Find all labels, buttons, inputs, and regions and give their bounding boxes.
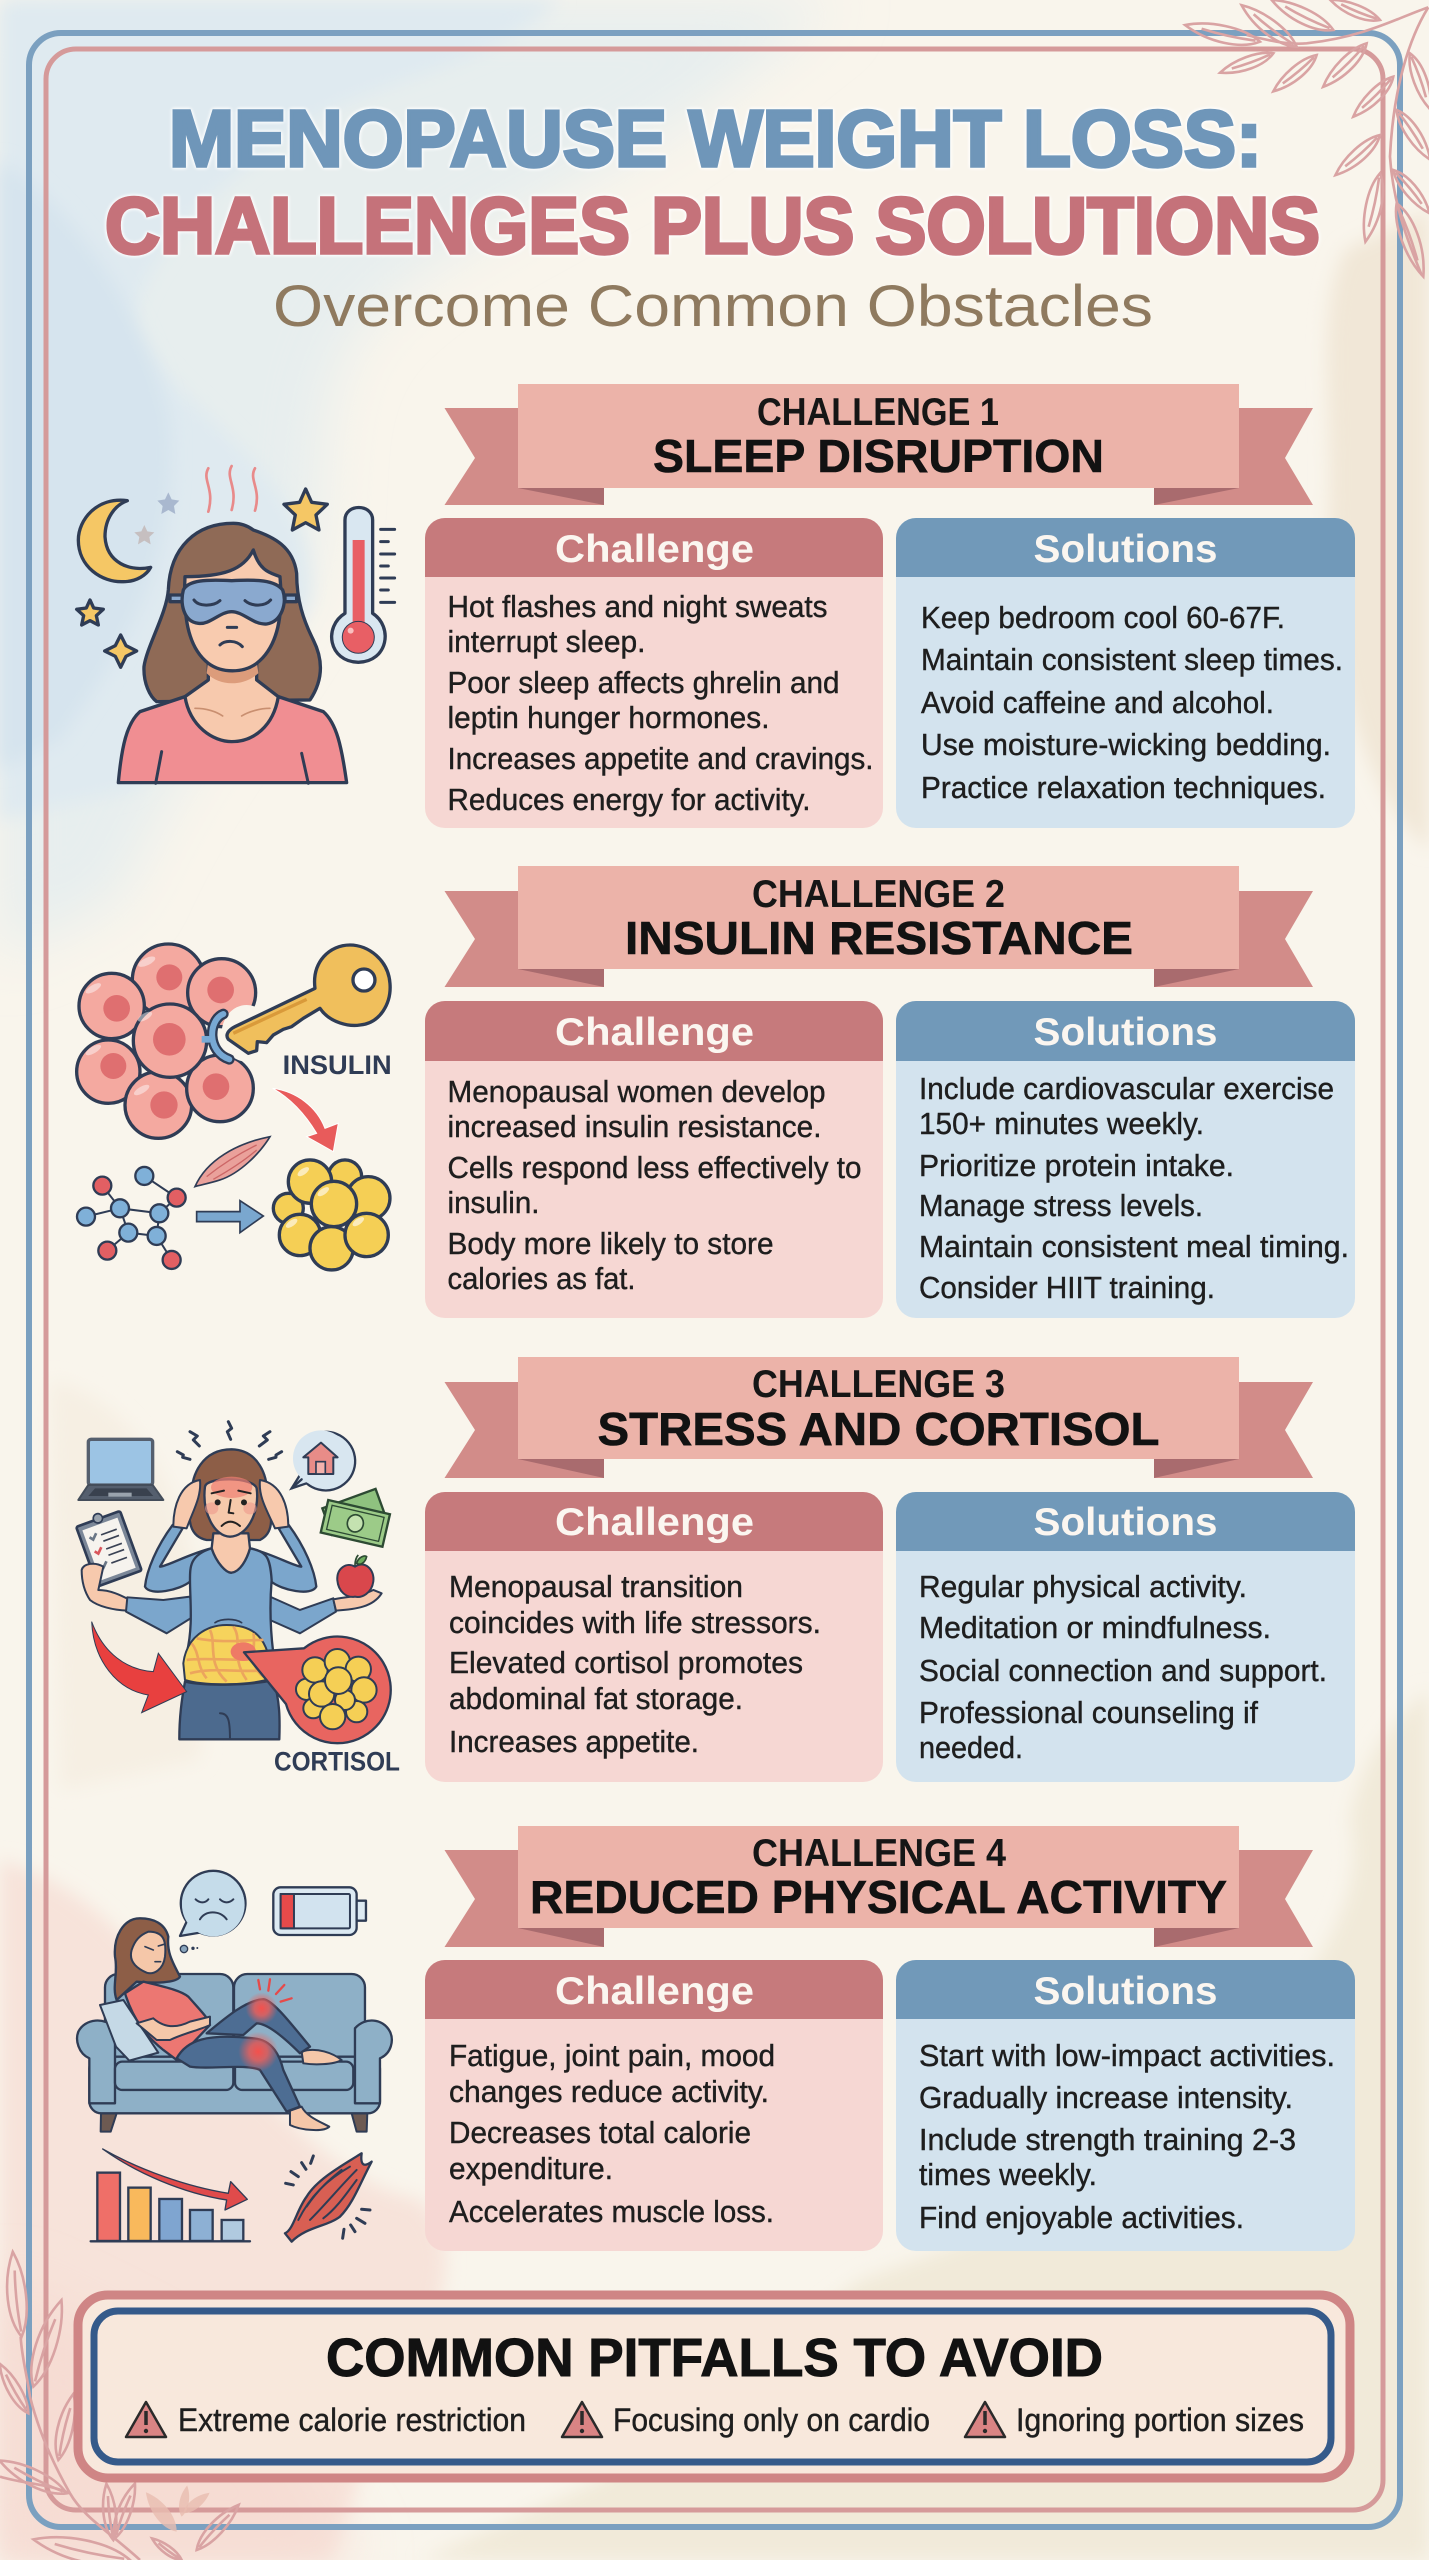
panel: challenge 2 causes: calories as fat.	[448, 1262, 636, 1296]
panel: challenge 4 solutions: Start with low-impact activities.	[919, 2039, 1335, 2073]
panel: challenge 2 solutions: Solutions	[1034, 1011, 1218, 1054]
panel: challenge 2 solutions: Consider HIIT training.	[919, 1271, 1215, 1305]
panel: challenge 1 solutions: Solutions	[1034, 528, 1218, 571]
panel: challenge 2 causes: Challenge	[555, 1011, 754, 1054]
panel: challenge 3 causes: Challenge	[555, 1501, 754, 1544]
panel: challenge 2 solutions: Include cardiovascular exercise	[919, 1072, 1334, 1106]
panel: challenge 3 solutions: Meditation or mindfulness.	[919, 1611, 1271, 1645]
panel: challenge 1 solutions: Practice relaxation techniques.	[921, 771, 1326, 805]
panel: challenge 2 solutions: Maintain consistent meal timing.	[919, 1230, 1349, 1264]
panel: challenge 4 causes: Challenge	[555, 1970, 754, 2013]
title line 2: CHALLENGES PLUS SOLUTIONS	[105, 181, 1320, 270]
panel: challenge 3 solutions: Regular physical activity.	[919, 1570, 1247, 1604]
panel: challenge 4 causes: changes reduce activity.	[449, 2075, 769, 2109]
panel: challenge 4 solutions: Gradually increase intensity.	[919, 2081, 1293, 2115]
title	[105, 94, 1320, 270]
panel: challenge 3 causes: Increases appetite.	[449, 1725, 699, 1759]
panel: challenge 3 causes: Menopausal transition	[449, 1570, 743, 1604]
subtitle: Overcome Common Obstacles	[273, 274, 1153, 339]
section: challenge 2	[425, 866, 1355, 1318]
panel: challenge 1 causes: leptin hunger hormones.	[448, 701, 770, 735]
panel: challenge 2 causes: Menopausal women develop	[448, 1075, 826, 1109]
panel: challenge 2 causes: Body more likely to store	[448, 1227, 774, 1261]
illustration: stressed woman with laptop, home, money, abdominal fat: CORTISOL	[274, 1747, 400, 1777]
panel: challenge 3 causes	[425, 1492, 883, 1782]
banner: challenge 3: CHALLENGE 3	[752, 1363, 1005, 1406]
panel: challenge 3 solutions: needed.	[919, 1731, 1023, 1765]
panel: challenge 3 causes: abdominal fat storage.	[449, 1682, 743, 1716]
panel: challenge 4 causes: expenditure.	[449, 2152, 613, 2186]
panel: challenge 2 causes: Cells respond less effectively to	[448, 1151, 862, 1185]
panel: common pitfalls	[78, 2295, 1350, 2478]
pitfalls heading: COMMON PITFALLS TO AVOID	[326, 2328, 1103, 2388]
panel: challenge 3 solutions	[896, 1492, 1355, 1782]
panel: challenge 4 causes: Decreases total calorie	[449, 2116, 751, 2150]
panel: challenge 4 causes: Fatigue, joint pain, mood	[449, 2039, 775, 2073]
title line 1: MENOPAUSE WEIGHT LOSS:	[169, 94, 1262, 183]
illustration: tired woman on sofa, battery, bars, muscle	[77, 1871, 392, 2242]
panel: challenge 1 causes: Reduces energy for activity.	[448, 783, 810, 817]
section: challenge 3	[425, 1357, 1355, 1782]
illustration: insulin key, cells, molecule and fat cluster	[77, 944, 392, 1270]
panel: challenge 2 solutions: Manage stress levels.	[919, 1189, 1203, 1223]
panel: challenge 4 solutions: times weekly.	[919, 2158, 1097, 2192]
pitfall: ignoring portion sizes: Ignoring portion sizes	[1016, 2402, 1304, 2438]
banner: challenge 2: CHALLENGE 2	[752, 873, 1005, 916]
panel: challenge 2 solutions	[896, 1001, 1355, 1318]
panel: challenge 1 solutions: Maintain consistent sleep times.	[921, 643, 1343, 677]
panel: challenge 1 causes: Poor sleep affects ghrelin and	[448, 666, 840, 700]
banner: challenge 4: CHALLENGE 4	[752, 1832, 1006, 1875]
banner: challenge 4	[444, 1826, 1313, 1947]
section: challenge 4	[425, 1826, 1355, 2251]
panel: challenge 2 causes	[425, 1001, 883, 1318]
panel: challenge 1 solutions	[896, 518, 1355, 828]
panel: challenge 2 causes: insulin.	[448, 1186, 540, 1220]
panel: challenge 1 solutions: Use moisture-wicking bedding.	[921, 728, 1331, 762]
illustration: insulin key, cells, molecule and fat cluster: INSULIN	[283, 1050, 392, 1080]
pitfall: focusing only on cardio: Focusing only on cardio	[613, 2402, 930, 2438]
panel: challenge 4 solutions	[896, 1960, 1355, 2251]
decoration: top-right leaves	[1183, 0, 1429, 279]
panel: challenge 1 causes: Challenge	[555, 528, 754, 571]
banner: challenge 1: SLEEP DISRUPTION	[653, 430, 1104, 482]
panel: challenge 4 causes	[425, 1960, 883, 2251]
panel: challenge 4 solutions: Include strength training 2-3	[919, 2123, 1296, 2157]
panel: challenge 1 causes: Increases appetite and cravings.	[448, 742, 874, 776]
panel: challenge 3 solutions: Social connection and support.	[919, 1654, 1327, 1688]
panel: challenge 1 causes: interrupt sleep.	[448, 625, 646, 659]
illustration: stressed woman with laptop, home, money, abdominal fat	[74, 1422, 400, 1777]
panel: challenge 1 causes	[425, 518, 883, 828]
panel: challenge 3 causes: coincides with life stressors.	[449, 1606, 821, 1640]
pitfall: extreme calorie restriction: Extreme calorie restriction	[178, 2402, 526, 2438]
panel: challenge 2 solutions: 150+ minutes weekly.	[919, 1107, 1204, 1141]
panel: challenge 2 causes: increased insulin resistance.	[448, 1110, 822, 1144]
panel: challenge 4 solutions: Solutions	[1034, 1970, 1218, 2013]
illustration: woman with sleep mask, moon, stars, thermometer	[77, 466, 395, 783]
panel: challenge 4 causes: Accelerates muscle loss.	[449, 2195, 774, 2229]
panel: challenge 3 solutions: Solutions	[1034, 1501, 1218, 1544]
banner: challenge 2	[444, 866, 1313, 987]
panel: challenge 1 causes: Hot flashes and night sweats	[448, 590, 828, 624]
banner: challenge 4: REDUCED PHYSICAL ACTIVITY	[530, 1871, 1227, 1923]
panel: challenge 2 solutions: Prioritize protein intake.	[919, 1149, 1234, 1183]
banner: challenge 3: STRESS AND CORTISOL	[598, 1403, 1160, 1455]
section: challenge 1	[425, 384, 1355, 828]
banner: challenge 1: CHALLENGE 1	[757, 391, 999, 434]
panel: challenge 4 solutions: Find enjoyable activities.	[919, 2201, 1244, 2235]
panel: challenge 3 solutions: Professional counseling if	[919, 1696, 1259, 1730]
banner: challenge 2: INSULIN RESISTANCE	[625, 912, 1133, 964]
panel: challenge 3 causes: Elevated cortisol promotes	[449, 1646, 803, 1680]
panel: challenge 1 solutions: Avoid caffeine and alcohol.	[921, 686, 1274, 720]
panel: challenge 1 solutions: Keep bedroom cool 60-67F.	[921, 601, 1285, 635]
decoration: bottom-left leaves	[0, 2251, 243, 2560]
banner: challenge 3	[444, 1357, 1313, 1478]
banner: challenge 1	[444, 384, 1313, 505]
